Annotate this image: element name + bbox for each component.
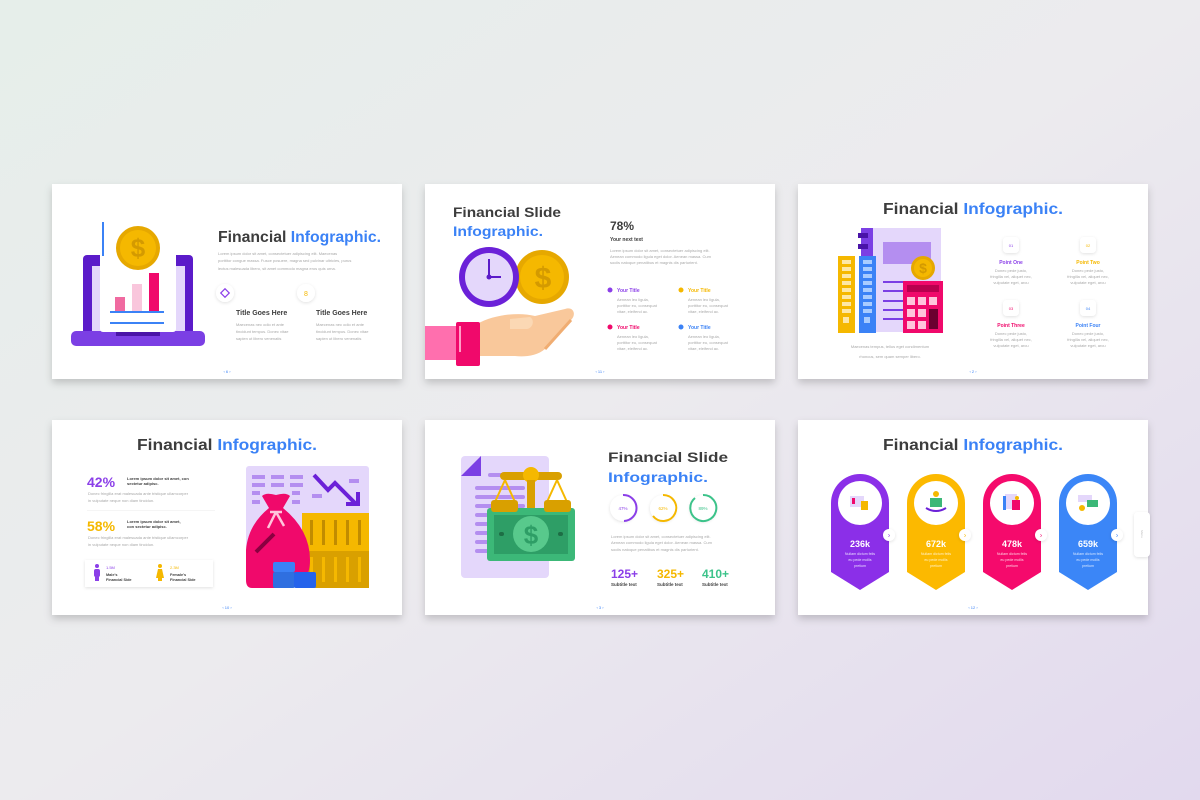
subheads: Title Goes Here [316, 310, 367, 317]
points grid: fringilla vel, aliquet nec, [990, 337, 1032, 342]
subheads: Maecenas nec odio et ante [316, 322, 365, 327]
body text: Aenean commodo ligula eget dolor. Aenean massa. Cum [611, 540, 713, 545]
numbers: 125+ [611, 567, 638, 581]
points grid: Donec pede justo, [1072, 331, 1104, 336]
points grid: Donec pede justo, [995, 331, 1027, 336]
points grid: 02 [1086, 243, 1091, 248]
icon: document, scale, banknote [461, 456, 575, 578]
card 236k [831, 474, 895, 590]
icon circles: 8 [304, 291, 308, 298]
four titled items: Your Title [617, 325, 640, 331]
icon: laptop with document [71, 217, 205, 346]
slide 1: laptop financial infographic: ‹ 6 › [223, 369, 231, 374]
card 659k: pretium [1082, 564, 1094, 568]
points grid [990, 237, 1109, 348]
side tab: Menu [1140, 530, 1144, 538]
slide 5: scale and money [425, 420, 775, 615]
subheads: Title Goes Here [236, 310, 287, 317]
title: Financial Infographic. [883, 437, 1063, 454]
icon: books, document, calculator [838, 228, 943, 333]
stat 58%: in vulputate neque non diam tincidun. [88, 542, 154, 547]
four titled items: Your Title [688, 325, 711, 331]
slide 6: four pill stat cards [798, 420, 1150, 615]
points grid: vulputate eget, arcu [1070, 343, 1106, 348]
points grid: 04 [1086, 306, 1091, 311]
title: Financial Slide [608, 449, 728, 465]
title: Infographic. [453, 223, 543, 239]
four titled items: porttitor eu, consequat [688, 303, 729, 308]
card 659k: 659k [1078, 539, 1099, 549]
four titled items: porttitor eu, consequat [688, 340, 729, 345]
icon circles [216, 284, 315, 302]
icon: laptop with document: $ [131, 233, 146, 263]
numbers: Subtitle text [657, 582, 683, 587]
stat 58%: Lorem ipsum dolor sit amet, [127, 519, 181, 524]
four titled items: vitae, eleifend ac. [617, 346, 648, 351]
four titled items [608, 288, 729, 351]
stat 42%: sectetur adipisc. [127, 481, 159, 486]
caption [851, 344, 930, 359]
progress rings: 62% [658, 506, 668, 511]
title: Financial Infographic. [137, 437, 317, 454]
points grid: Point Three [997, 323, 1025, 329]
card 659k: Nullam dictum felis [1073, 552, 1103, 556]
slide 1: laptop financial infographic [52, 184, 402, 379]
title [453, 204, 561, 239]
subheads: Maecenas nec odio et ante [236, 322, 285, 327]
slide 6: four pill stat cards: ‹ 12 › [968, 605, 978, 610]
male/female card: Financial Side [106, 578, 132, 582]
body text [218, 251, 351, 271]
progress rings: 89% [698, 506, 708, 511]
title: Infographic. [608, 469, 708, 485]
card 478k: Nullam dictum felis [997, 552, 1027, 556]
slide 2: hand with clock and coin [425, 184, 775, 379]
four titled items: Aenean leo ligula, [617, 297, 649, 302]
card 236k: pretium [854, 564, 866, 568]
side tab [1134, 512, 1150, 557]
stat 42%: 42% [87, 474, 116, 490]
body text: Lorem ipsum dolor sit amet, consectetuer adipiscing elit. Maecenas [218, 251, 337, 256]
caption: rhoncus, sem quam semper libero. [859, 354, 921, 359]
body text [611, 534, 713, 552]
points grid: 01 [1009, 243, 1014, 248]
card 672k: 672k [926, 539, 947, 549]
card 659k: eu pede mollis [1076, 558, 1100, 562]
card 236k: eu pede mollis [848, 558, 872, 562]
card 659k [1059, 474, 1123, 590]
points grid: Point Two [1076, 260, 1100, 266]
stat 78%: 78% [610, 219, 634, 233]
icon: money bag, chart, crates [246, 466, 369, 588]
four titled items: Aenean leo ligula, [688, 334, 720, 339]
subheads: sapien ut libero venenatis [316, 336, 361, 341]
title: Financial Slide [453, 204, 561, 220]
body text: Lorem ipsum dolor sit amet, consectetuer adipiscing elit. [611, 534, 711, 539]
card 672k: Nullam dictum felis [921, 552, 951, 556]
stat 78%: sociis natoque penatibus et magnis dis parturient. [610, 260, 698, 265]
card 672k [907, 474, 971, 590]
subheads: tincidunt tempus. Donec vitae [236, 329, 289, 334]
male/female card: Male's [106, 573, 117, 577]
points grid: Donec pede justo, [1072, 268, 1104, 273]
numbers: 325+ [657, 567, 684, 581]
stat 42%: in vulputate neque non diam tincidun. [88, 498, 154, 503]
slide 5: scale and money: ‹ 3 › [596, 605, 604, 610]
card 672k: pretium [930, 564, 942, 568]
slide 2: hand with clock and coin: ‹ 11 › [595, 369, 605, 374]
stat 78%: Lorem ipsum dolor sit amet, consectetuer adipiscing elit. [610, 248, 710, 253]
points grid: vulputate eget, arcu [993, 343, 1029, 348]
card 672k: › [964, 532, 967, 540]
slide 3: books and calculator: ‹ 2 › [969, 369, 977, 374]
four titled items: Aenean leo ligula, [688, 297, 720, 302]
body text: lectus malesuada libero, sit amet commodo magna eros quis urna. [218, 266, 336, 271]
four titled items: porttitor eu, consequat [617, 303, 658, 308]
stat 58% [87, 518, 189, 547]
card 236k: 236k [850, 539, 871, 549]
points grid: vulputate eget, arcu [993, 280, 1029, 285]
male/female card: 1.5M [106, 565, 115, 570]
body text: sociis natoque penatibus et magnis dis parturient. [611, 547, 699, 552]
card 478k: › [1040, 532, 1043, 540]
card 478k [983, 474, 1047, 590]
four titled items: vitae, eleifend ac. [688, 309, 719, 314]
card 478k: pretium [1006, 564, 1018, 568]
male/female card: Female's [170, 573, 186, 577]
male/female card [85, 560, 213, 587]
progress rings [610, 495, 716, 521]
subheads [236, 310, 369, 341]
slide 3: books and calculator [798, 184, 1148, 379]
points grid: 03 [1009, 306, 1014, 311]
subheads: sapien ut libero venenatis [236, 336, 281, 341]
numbers: Subtitle text [611, 582, 637, 587]
stat 78% [610, 219, 712, 265]
points grid: Point Four [1076, 323, 1101, 329]
icon: books, document, calculator: $ [919, 260, 927, 276]
stat 58%: con sectetur adipisc. [127, 524, 167, 529]
title [608, 449, 728, 485]
card 478k: eu pede mollis [1000, 558, 1024, 562]
body text: porttitor congue massa. Fusce posuere, magna sed pulvinar ultricies, purus [218, 258, 351, 263]
four titled items: porttitor eu, consequat [617, 340, 658, 345]
stat 78%: Your next text [610, 237, 643, 243]
points grid: vulputate eget, arcu [1070, 280, 1106, 285]
points grid: fringilla vel, aliquet nec, [990, 274, 1032, 279]
card 672k: eu pede mollis [924, 558, 948, 562]
card 236k: Nullam dictum felis [845, 552, 875, 556]
subheads: tincidunt tempus. Donec vitae [316, 329, 369, 334]
points grid: fringilla vel, aliquet nec, [1067, 274, 1109, 279]
four titled items: Your Title [617, 288, 640, 294]
numbers: 410+ [702, 567, 729, 581]
stat 42% [87, 474, 189, 503]
stat 42%: Lorem ipsum dolor sit amet, con [127, 476, 189, 481]
icon: hand, clock, coin [425, 247, 574, 366]
icon: hand, clock, coin: $ [535, 262, 552, 295]
points grid: Point One [999, 260, 1023, 266]
title: Financial Infographic. [218, 229, 381, 246]
stat 58%: Donec fringilla erat malesuada ante tristique ullamcorper [88, 535, 189, 540]
stat 42%: Donec fringilla erat malesuada ante tristique ullamcorper [88, 491, 189, 496]
four titled items: Your Title [688, 288, 711, 294]
numbers [611, 567, 729, 587]
numbers: Subtitle text [702, 582, 728, 587]
slide 4: money bag and statistics [52, 420, 402, 615]
progress rings: 47% [618, 506, 628, 511]
male/female card: Financial Side [170, 578, 196, 582]
stat 58%: 58% [87, 518, 116, 534]
points grid: fringilla vel, aliquet nec, [1067, 337, 1109, 342]
points grid: Donec pede justo, [995, 268, 1027, 273]
card 659k: › [1116, 532, 1119, 540]
caption: Maecenas tempus, tellus eget condimentum [851, 344, 930, 349]
four titled items: vitae, eleifend ac. [617, 309, 648, 314]
male/female card: 2.3M [170, 565, 179, 570]
icon: document, scale, banknote: $ [524, 520, 539, 550]
card 478k: 478k [1002, 539, 1023, 549]
card 236k: › [888, 532, 891, 540]
four titled items: Aenean leo ligula, [617, 334, 649, 339]
title: Financial Infographic. [883, 201, 1063, 218]
four titled items: vitae, eleifend ac. [688, 346, 719, 351]
stat 78%: Aenean commodo ligula eget dolor. Aenean massa. Cum [610, 254, 712, 259]
slide 4: money bag and statistics: ‹ 10 › [222, 605, 232, 610]
